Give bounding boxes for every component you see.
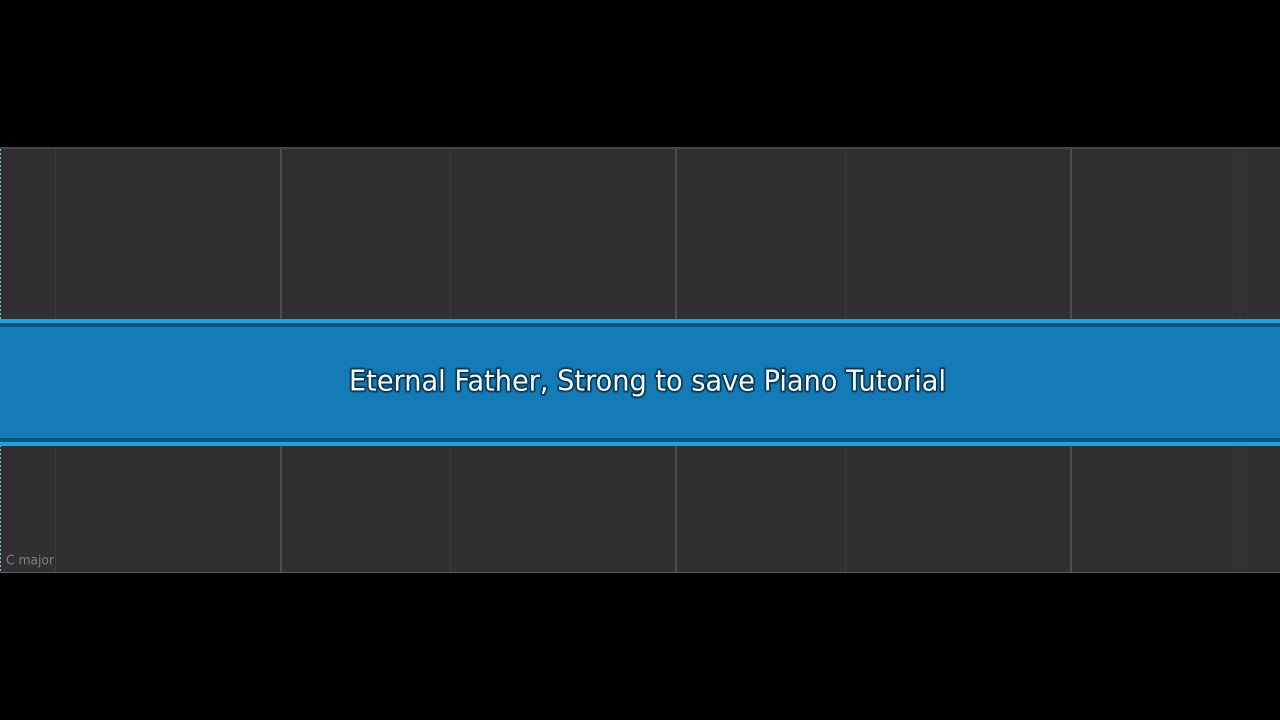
- title banner: [0, 319, 1280, 446]
- key label: C major: C major: [6, 552, 54, 568]
- title: Eternal Father, Strong to save Piano Tutorial: [349, 364, 946, 398]
- panel: piano roll grid: [0, 147, 1280, 573]
- title: Eternal Father, Strong to save Piano Tutorial: [349, 364, 946, 398]
